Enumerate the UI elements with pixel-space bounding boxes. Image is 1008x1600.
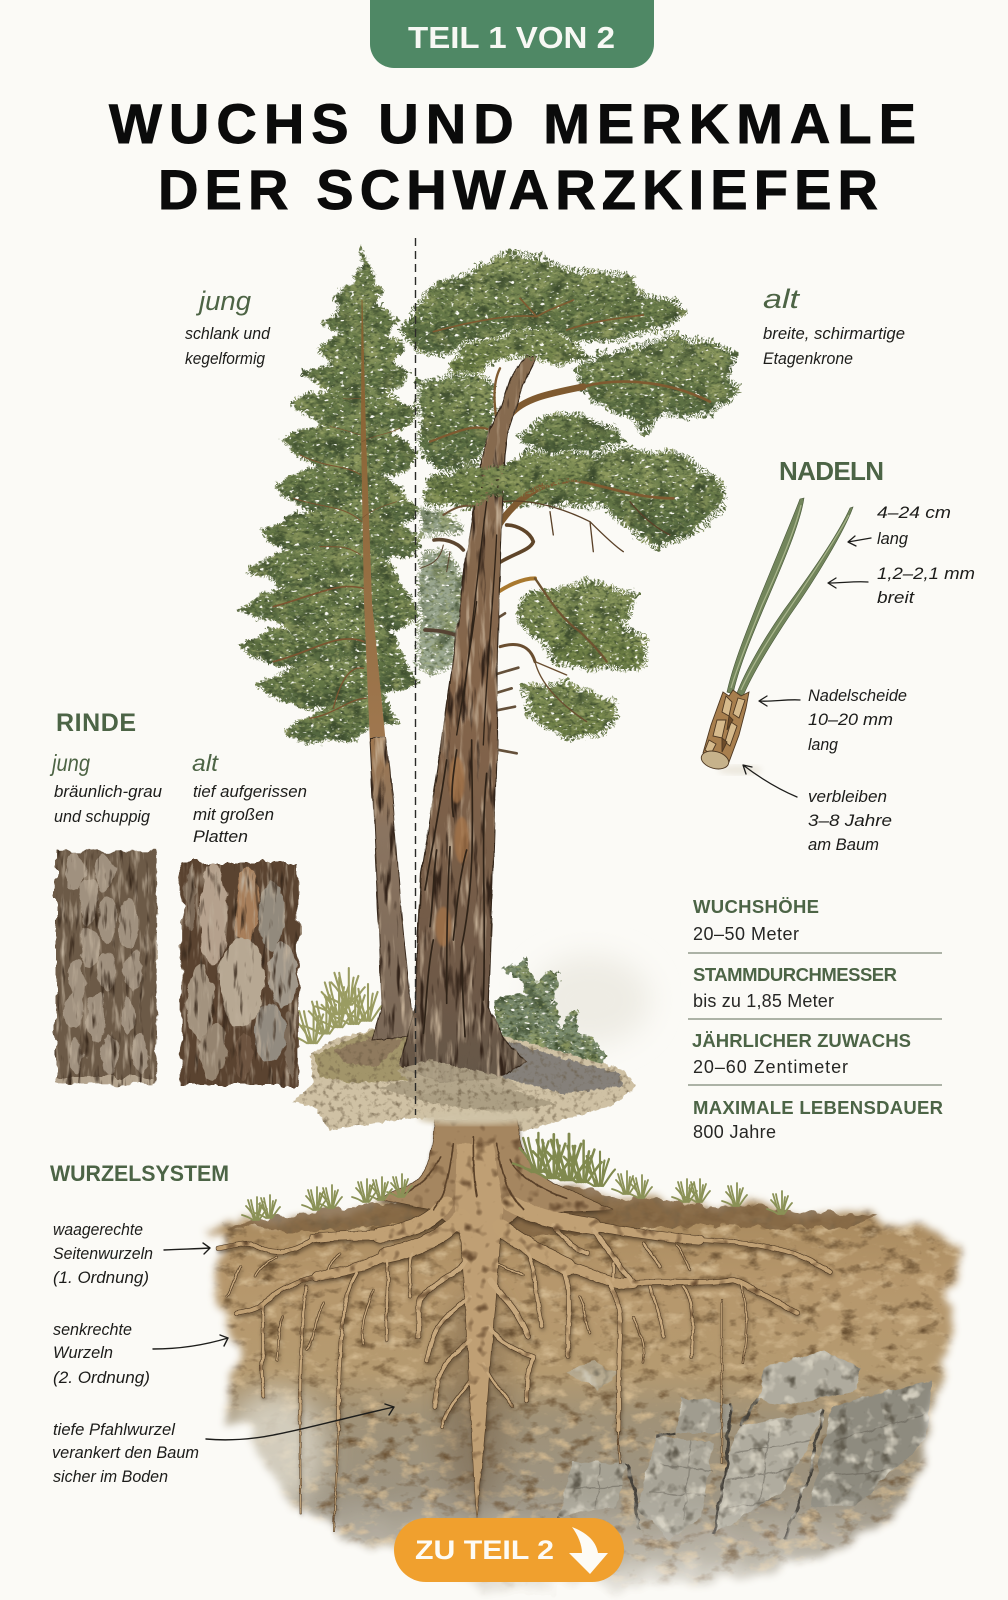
grass left of young tree [290,968,384,1043]
button: zu Teil 2: ZU TEIL 2 [415,1535,554,1565]
old tree foliage front [431,329,608,503]
needle labels: 10–20 mm [808,710,893,729]
old bark text [192,750,307,846]
root labels: (2. Ordnung) [53,1368,150,1387]
secondary roots [227,1225,747,1530]
young bark sample [55,850,157,1084]
label: tree old [763,284,905,368]
root labels: Wurzeln [53,1343,113,1362]
old bark text: mit großen [193,805,274,824]
crown cracks [400,1137,567,1210]
taproot [455,1143,503,1518]
stats table: WUCHSHÖHE [693,896,819,917]
stats table: STAMMDURCHMESSER [693,964,897,985]
title: DER SCHWARZKIEFER [158,158,878,221]
mound overlap on tree base [397,1060,523,1093]
lateral roots [218,1203,830,1313]
root labels: senkrechte [53,1320,132,1339]
root labels: Seitenwurzeln [53,1244,153,1263]
root labels [52,1220,199,1486]
pale soil fade left [225,1390,325,1510]
topsoil band [225,1178,880,1240]
stats table: 20–50 Meter [693,924,799,944]
icon: needle sheath [699,690,749,772]
needle labels [808,503,975,854]
bush behind trunk [493,955,650,1071]
label: tree old: breite, schirmartige [763,324,905,343]
bark panel heading: RINDE [56,709,136,737]
root system [218,1120,830,1530]
needle labels: 1,2–2,1 mm [877,564,975,583]
icon: curved arrow [569,1527,608,1574]
needles heading: NADELN [779,456,884,486]
stats table: MAXIMALE LEBENSDAUER [693,1097,943,1118]
young bark text: und schuppig [54,807,151,826]
root labels: (1. Ordnung) [53,1268,149,1287]
label: tree young: kegelformig [185,349,265,368]
young tree foliage [240,254,418,742]
badge: Teil 1 von 2: TEIL 1 VON 2 [408,20,615,55]
grass on soil surface [242,1171,792,1220]
root labels: tiefe Pfahlwurzel [53,1420,176,1439]
young tree [240,254,418,1040]
root labels: sicher im Boden [53,1467,168,1486]
label: tree old: Etagenkrone [763,349,853,368]
label: tree young: schlank und [185,324,271,343]
root labels: waagerechte [53,1220,143,1239]
old tree [400,258,738,1082]
young tree branches [273,398,400,718]
old bark sample [182,862,298,1086]
root system heading: WURZELSYSTEM [50,1161,229,1186]
label: tree old: alt [763,284,801,314]
old bark text: Platten [193,827,248,846]
old bark text: alt [192,750,220,776]
tall grass tuft beside root neck [513,1133,615,1186]
stats table: 20–60 Zentimeter [693,1057,848,1077]
needle labels: Nadelscheide [808,686,907,705]
young bark text: jung [49,750,90,776]
needle labels: 3–8 Jahre [808,811,892,830]
label: tree young [185,286,271,368]
old tree branches [420,298,710,753]
needle labels: 4–24 cm [877,503,951,522]
badge: Teil 1 von 2 [370,0,654,68]
button: zu Teil 2 [394,1518,624,1582]
root crown [377,1120,613,1237]
label: tree young: jung [195,286,251,316]
needle labels: breit [877,588,915,607]
divider: young / old dashed line [414,238,416,1115]
young bark text: bräunlich-grau [54,782,163,801]
dark shade beside taproot [442,1290,510,1510]
young tree trunk bottom [370,738,416,1040]
icon: pine needle pair [699,498,853,775]
title [109,92,916,221]
old tree trunk [400,355,537,1082]
stats table: bis zu 1,85 Meter [693,991,834,1011]
rocks [552,1352,932,1550]
needle labels: lang [877,529,909,548]
root labels: verankert den Baum [52,1443,199,1462]
needle labels: am Baum [808,835,879,854]
title: WUCHS UND MERKMALE [109,92,916,155]
soil cross-section [203,1180,968,1596]
young tree trunk top [361,300,386,745]
ground mound [293,1013,637,1132]
needle labels: lang [808,735,839,754]
stats table: 800 Jahre [693,1122,776,1142]
root label arrows [153,1243,394,1440]
young bark text [49,750,163,826]
old bark text: tief aufgerissen [193,782,307,801]
needle labels: verbleiben [808,787,887,806]
stats table [688,896,943,1142]
stats table: JÄHRLICHER ZUWACHS [692,1030,911,1051]
needle arrows [743,536,871,797]
soft mound edge over root neck [418,1111,534,1125]
old tree foliage back [403,258,738,734]
